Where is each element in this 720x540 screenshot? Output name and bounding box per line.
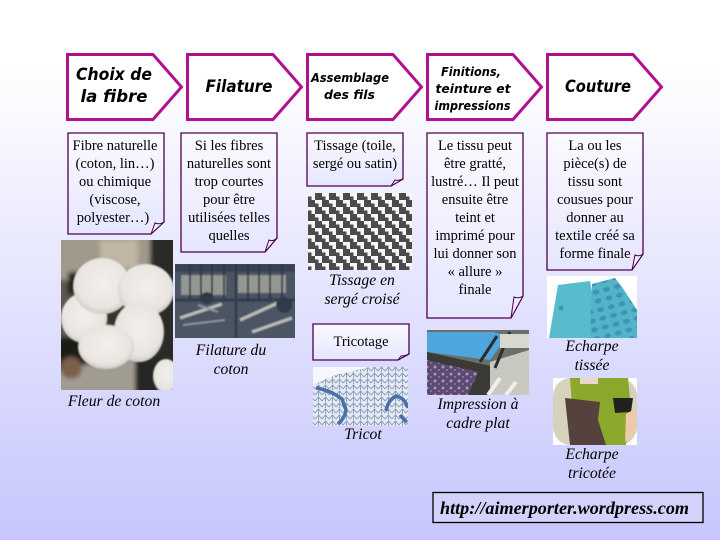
step arrow: Choix de la fibre	[68, 54, 182, 120]
photo: cotton spinning mill	[175, 264, 295, 338]
note: filature	[181, 133, 277, 252]
photo: knitted sling	[553, 378, 637, 445]
caption: Impression à cadre plat: cadre plat	[446, 415, 510, 432]
note: finitions: teint et	[455, 210, 495, 226]
caption: Echarpe tricotée: tricotée	[568, 465, 616, 482]
caption: Impression à cadre plat: Impression à	[437, 396, 519, 413]
caption: Impression à cadre plat	[437, 396, 519, 432]
step arrow: Assemblage des fils: Assemblage	[310, 70, 389, 85]
step arrow: Filature: Filature	[206, 77, 272, 96]
caption: Filature du coton	[195, 342, 266, 378]
note: fibre: Fibre naturelle	[73, 138, 157, 154]
step arrow: Finitions, teinture et impressions	[428, 54, 542, 120]
note: fibre: (coton, lin…)	[76, 156, 155, 172]
note: finitions: Le tissu peut	[438, 138, 512, 154]
note: couture	[547, 133, 643, 270]
step arrow: Finitions, teinture et impressions: impressions	[434, 98, 510, 113]
note: finitions: imprimé pour	[435, 228, 515, 244]
note: finitions	[427, 133, 523, 318]
note: finitions: lustré… Il peut	[431, 174, 519, 190]
note: fibre: polyester…)	[77, 210, 149, 226]
note: couture: textile créé sa	[555, 228, 635, 244]
step arrow: Choix de la fibre: la fibre	[80, 87, 148, 106]
note: filature: quelles	[208, 228, 250, 244]
note: filature: utilisées telles	[188, 210, 270, 226]
note: finitions: être gratté,	[444, 156, 506, 172]
caption: Tricot: Tricot	[344, 426, 382, 443]
note: couture: pièce(s) de	[563, 156, 627, 172]
website link box	[433, 492, 703, 522]
photo: knit diagram	[313, 367, 408, 426]
photo: woven sling	[547, 276, 637, 338]
caption: Filature du coton: coton	[214, 361, 249, 378]
note: tricotage	[313, 324, 409, 360]
step arrow: Finitions, teinture et impressions: teinture et	[436, 81, 512, 96]
caption: Tissage en sergé croisé	[324, 272, 401, 308]
note: finitions: ensuite être	[442, 192, 508, 208]
caption: Tissage en sergé croisé: sergé croisé	[324, 291, 401, 308]
note: finitions: lui donner son	[434, 246, 517, 262]
note: tricotage: Tricotage	[333, 334, 389, 350]
note: couture: La ou les	[568, 138, 622, 154]
note: fibre: ou chimique	[79, 174, 151, 190]
note: tissage	[307, 133, 403, 186]
note: tissage: sergé ou satin)	[313, 156, 397, 172]
photo: cotton flower	[61, 240, 173, 390]
note: fibre	[68, 133, 164, 234]
note: filature: pour être	[203, 192, 255, 208]
caption: Tissage en sergé croisé: Tissage en	[329, 272, 395, 289]
photo: flat-screen printing	[427, 330, 529, 395]
note: finitions: « allure »	[448, 264, 502, 280]
photo: twill weave	[308, 193, 412, 270]
caption: Filature du coton: Filature du	[195, 342, 266, 359]
note: tissage: Tissage (toile,	[314, 138, 396, 154]
step arrow: Choix de la fibre: Choix de	[76, 65, 152, 84]
step arrow: Assemblage des fils: des fils	[324, 87, 375, 102]
note: couture: forme finale	[559, 246, 631, 262]
caption: Echarpe tricotée: Echarpe	[564, 446, 619, 463]
caption: Echarpe tricotée	[564, 446, 619, 482]
note: fibre: (viscose,	[89, 192, 141, 208]
website link box: http://aimerporter.wordpress.com	[440, 498, 689, 518]
step arrow: Finitions, teinture et impressions: Finitions,	[441, 64, 501, 79]
step arrow: Assemblage des fils	[308, 54, 422, 120]
note: filature: naturelles sont	[187, 156, 271, 172]
caption: Echarpe tissée	[564, 338, 619, 374]
caption: Fleur de coton: Fleur de coton	[67, 393, 160, 410]
note: filature: trop courtes	[195, 174, 264, 190]
note: couture: cousues pour	[557, 192, 633, 208]
note: finitions: finale	[458, 282, 492, 298]
step arrow: Filature	[188, 54, 302, 120]
note: couture: donner au	[566, 210, 624, 226]
step arrow: Couture: Couture	[565, 77, 631, 96]
note: filature: Si les fibres	[195, 138, 264, 154]
step arrow: Couture	[548, 54, 662, 120]
caption: Echarpe tissée: tissée	[575, 357, 609, 374]
note: couture: tissu sont	[568, 174, 622, 190]
caption: Echarpe tissée: Echarpe	[564, 338, 619, 355]
